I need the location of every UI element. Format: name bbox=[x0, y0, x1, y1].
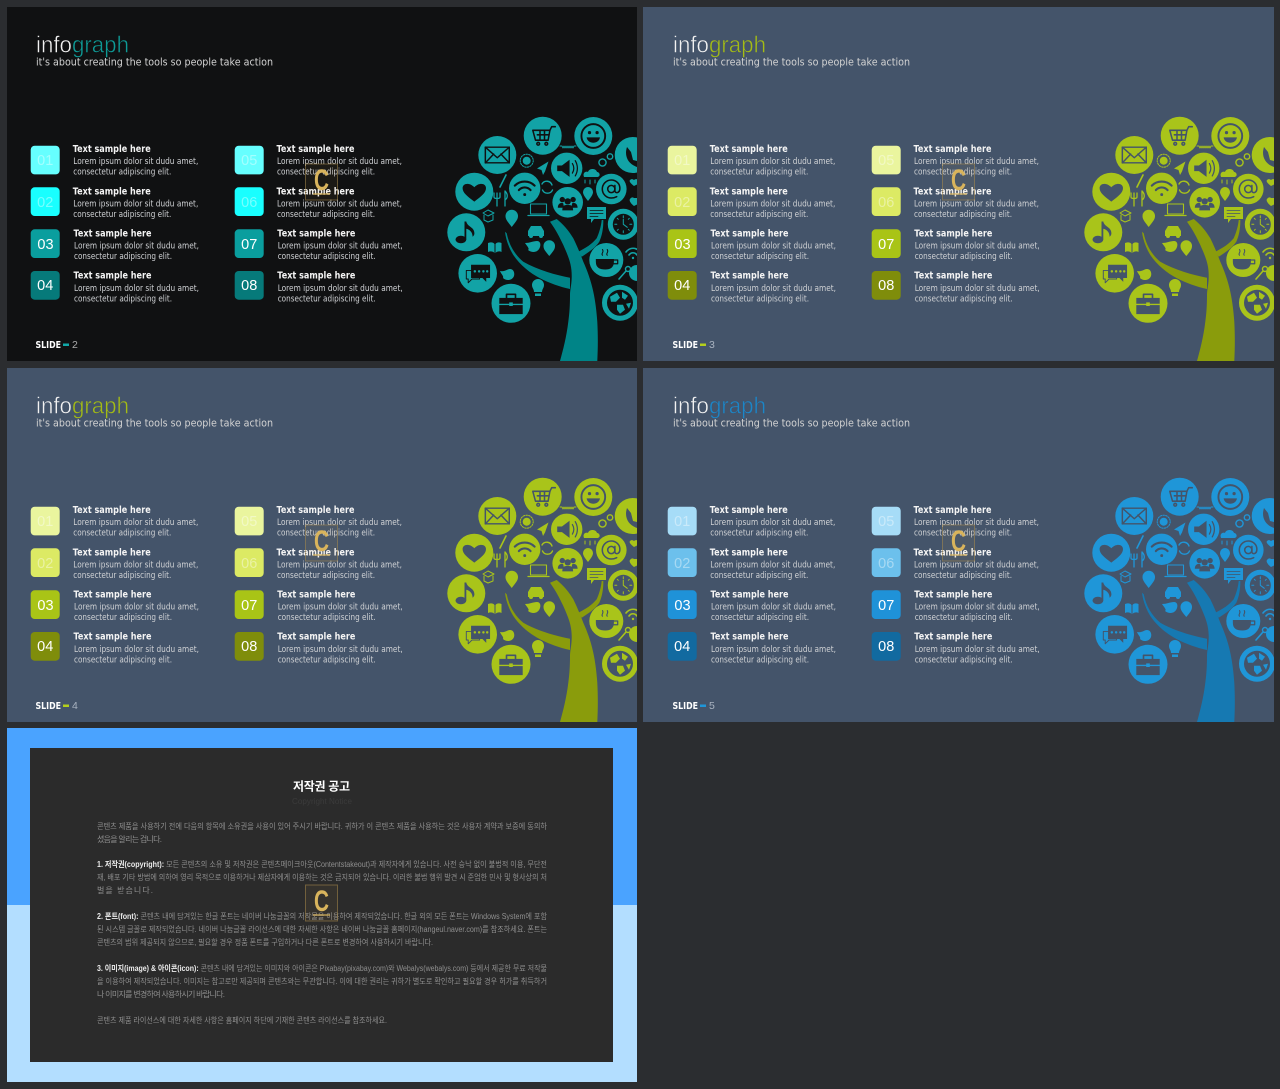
panel: slide 4 lime bbox=[7, 368, 651, 722]
list item 03: Lorem ipsum dolor sit dudu amet, bbox=[74, 241, 199, 251]
list item 06: consectetur adipiscing elit. bbox=[914, 571, 1012, 581]
section 2 font bbox=[97, 911, 548, 947]
intro paragraph bbox=[97, 821, 548, 844]
list item 07: consectetur adipiscing elit. bbox=[278, 252, 376, 262]
list item 03: 03 bbox=[37, 237, 54, 253]
list item 01 bbox=[668, 144, 835, 178]
list item 01: 01 bbox=[37, 153, 53, 169]
list item 05: 05 bbox=[241, 514, 257, 530]
list item 04: Lorem ipsum dolor sit dudu amet, bbox=[74, 284, 199, 294]
list item 08: consectetur adipiscing elit. bbox=[915, 294, 1013, 304]
watermark badge bbox=[306, 525, 338, 561]
slide number bbox=[36, 339, 78, 351]
list item 02: 02 bbox=[674, 556, 690, 572]
list item 05 bbox=[872, 505, 1039, 538]
tree graphic bbox=[447, 117, 651, 361]
list item 07: Text sample here bbox=[277, 228, 355, 239]
list item 04: consectetur adipiscing elit. bbox=[74, 655, 172, 665]
list item 05: Lorem ipsum dolor sit dudu amet, bbox=[277, 157, 402, 167]
list item 02: consectetur adipiscing elit. bbox=[73, 571, 171, 581]
watermark badge: C bbox=[951, 164, 966, 197]
list item 05: Lorem ipsum dolor sit dudu amet, bbox=[914, 157, 1039, 167]
list item 08: 08 bbox=[241, 278, 257, 294]
list item 01: 01 bbox=[37, 514, 53, 530]
list item 03 bbox=[668, 228, 836, 262]
list item 01: Lorem ipsum dolor sit dudu amet, bbox=[73, 518, 198, 528]
list item 05: consectetur adipiscing elit. bbox=[277, 168, 375, 178]
title: infograph bbox=[673, 392, 766, 418]
list item 02: consectetur adipiscing elit. bbox=[710, 210, 808, 220]
list item 02: Text sample here bbox=[710, 186, 788, 197]
tree graphic bbox=[1084, 478, 1280, 722]
list item 08: Lorem ipsum dolor sit dudu amet, bbox=[915, 645, 1040, 655]
list item 01: Text sample here bbox=[710, 505, 788, 516]
list item 01: Lorem ipsum dolor sit dudu amet, bbox=[710, 518, 835, 528]
list item 08: Text sample here bbox=[277, 270, 355, 282]
closing note: 콘텐츠 제품 라이선스에 대한 자세한 사항은 홈페이지 하단에 기재한 콘텐츠 라이선스를 참조하세요. bbox=[97, 1015, 387, 1025]
list item 08: Text sample here bbox=[277, 632, 355, 642]
section 1 copyright: 벌을 받습니다. bbox=[97, 885, 153, 895]
slide number: 3 bbox=[709, 339, 715, 351]
slide number bbox=[672, 700, 715, 712]
section 3 image and icon: 나 이미지를 변경하여 사용하시기 바랍니다. bbox=[97, 989, 225, 999]
list item 08: Lorem ipsum dolor sit dudu amet, bbox=[915, 284, 1040, 294]
slide number: 4 bbox=[72, 700, 78, 712]
watermark badge bbox=[942, 525, 974, 561]
list item 06: Text sample here bbox=[276, 186, 355, 197]
list item 03: consectetur adipiscing elit. bbox=[711, 252, 809, 262]
list item 01: Text sample here bbox=[710, 144, 788, 155]
section 2 font: 콘텐츠의 범위 제공되지 않으므로, 필요할 경우 정품 폰트를 구입하거나 다른 폰트로 변경하여 사용하시기 바랍니다. bbox=[97, 937, 433, 947]
list item 02: consectetur adipiscing elit. bbox=[73, 210, 171, 220]
list item 05: 05 bbox=[241, 153, 257, 169]
list item 06: Text sample here bbox=[276, 547, 355, 558]
list item 02: Lorem ipsum dolor sit dudu amet, bbox=[73, 199, 198, 209]
slide number: SLIDE bbox=[672, 701, 698, 712]
section 1 copyright: 1. 저작권(copyright): 모든 콘텐츠의 소유 및 저작권은 콘텐츠메이크아웃(Contentstakeout)과 제작자에게 있습니다. 사전 승낙 없이 불법적 이용, 무단전 bbox=[97, 859, 547, 869]
list item 01: consectetur adipiscing elit. bbox=[710, 168, 808, 178]
list item 05: consectetur adipiscing elit. bbox=[277, 528, 375, 538]
list item 06 bbox=[235, 186, 402, 220]
list item 03: Text sample here bbox=[74, 228, 152, 239]
list item 01: consectetur adipiscing elit. bbox=[73, 168, 171, 178]
list item 08 bbox=[872, 632, 1040, 665]
slide number: 2 bbox=[72, 339, 78, 351]
list item 02: Text sample here bbox=[73, 186, 151, 197]
section 3 image and icon: 을 이용하여 제작되었습니다. 이미지는 참고로만 제공되며 콘텐츠와는 무관합니다. 이에 대한 권리는 귀하가 별도로 확인하고 필요할 경우 허가를 취득하거 bbox=[97, 976, 547, 986]
list item 04: Lorem ipsum dolor sit dudu amet, bbox=[711, 645, 836, 655]
list item 07: Lorem ipsum dolor sit dudu amet, bbox=[915, 602, 1040, 612]
title: infograph bbox=[36, 32, 129, 58]
watermark badge: C bbox=[951, 525, 966, 558]
slide number: SLIDE bbox=[36, 340, 61, 351]
list item 06 bbox=[872, 547, 1039, 581]
list item 06: Lorem ipsum dolor sit dudu amet, bbox=[277, 560, 402, 570]
list item 06: Text sample here bbox=[914, 186, 992, 197]
slide number bbox=[36, 700, 78, 712]
list item 03: Text sample here bbox=[74, 589, 152, 600]
list item 01: Lorem ipsum dolor sit dudu amet, bbox=[710, 157, 835, 167]
list item 03: consectetur adipiscing elit. bbox=[74, 252, 172, 262]
subtitle: it's about creating the tools so people take action bbox=[36, 416, 273, 430]
list item 08: Text sample here bbox=[914, 270, 992, 282]
list item 08 bbox=[872, 270, 1040, 304]
intro paragraph: 셨음을 알리는 겁니다. bbox=[97, 834, 162, 844]
panel: slide 5 blue bbox=[643, 368, 1280, 722]
list item 04 bbox=[668, 270, 836, 304]
list item 07 bbox=[872, 589, 1040, 623]
intro paragraph: 콘텐츠 제품을 사용하기 전에 다음의 항목에 소유권을 사용이 있어 주시기 바랍니다. 귀하가 이 콘텐츠 제품을 사용하는 것은 사용자 계약과 보증에 동의하 bbox=[97, 821, 548, 831]
list item 06: Lorem ipsum dolor sit dudu amet, bbox=[914, 560, 1039, 570]
list item 02: Text sample here bbox=[73, 547, 151, 558]
list item 04: Text sample here bbox=[74, 270, 152, 282]
list item 06: 06 bbox=[878, 556, 894, 572]
section 1 copyright: 재, 배포 기타 방법에 의하여 영리 목적으로 이용하거나 제삼자에게 이용하는 것은 금지되어 있습니다. 이러한 불법 행위 발견 시 준엄한 민사 및 형사상의 처 bbox=[97, 872, 547, 882]
list item 01: Lorem ipsum dolor sit dudu amet, bbox=[73, 157, 198, 167]
list item 03: Text sample here bbox=[710, 228, 789, 239]
list item 01: 01 bbox=[674, 153, 690, 169]
list item 08: consectetur adipiscing elit. bbox=[278, 655, 376, 665]
list item 07: Text sample here bbox=[914, 589, 992, 600]
list item 05: Text sample here bbox=[914, 144, 992, 155]
list item 06: 06 bbox=[878, 195, 894, 211]
list item 01: Text sample here bbox=[73, 144, 151, 155]
list item 02: 02 bbox=[37, 195, 53, 211]
list item 03: consectetur adipiscing elit. bbox=[74, 613, 172, 623]
list item 07: Text sample here bbox=[914, 228, 992, 239]
slide number: 5 bbox=[709, 700, 715, 712]
section 3 image and icon bbox=[97, 963, 547, 999]
list item 08: consectetur adipiscing elit. bbox=[915, 655, 1013, 665]
list item 02: Lorem ipsum dolor sit dudu amet, bbox=[710, 199, 835, 209]
section 2 font: 된 시스템 글꼴로 제작되었습니다. 네이버 나눔글꼴 라이선스에 대한 자세한 사항은 네이버 나눔글꼴 홈페이지(hangeul.naver.com)를 참조하세요. 폰트는 bbox=[97, 924, 547, 934]
list item 04: Lorem ipsum dolor sit dudu amet, bbox=[711, 284, 836, 294]
list item 06: 06 bbox=[241, 556, 257, 572]
list item 07: consectetur adipiscing elit. bbox=[915, 252, 1013, 262]
list item 03: Lorem ipsum dolor sit dudu amet, bbox=[711, 241, 836, 251]
list item 04: consectetur adipiscing elit. bbox=[711, 655, 809, 665]
list item 03: 03 bbox=[674, 237, 691, 253]
list item 08: consectetur adipiscing elit. bbox=[278, 294, 376, 304]
list item 02: Text sample here bbox=[710, 547, 788, 558]
watermark badge: C bbox=[314, 525, 329, 558]
list item 02: Lorem ipsum dolor sit dudu amet, bbox=[710, 560, 835, 570]
list item 07: 07 bbox=[241, 237, 257, 253]
list item 08: 08 bbox=[878, 639, 894, 655]
panel: copyright notice bbox=[7, 728, 637, 1082]
watermark badge bbox=[942, 164, 974, 200]
list item 04: 04 bbox=[37, 639, 53, 655]
list item 04 bbox=[31, 632, 199, 665]
list item 03: Text sample here bbox=[710, 589, 789, 600]
title: infograph bbox=[673, 32, 766, 58]
list item 01: consectetur adipiscing elit. bbox=[73, 528, 171, 538]
notice heading: 저작권 공고 bbox=[293, 778, 350, 794]
list item 07: Lorem ipsum dolor sit dudu amet, bbox=[915, 241, 1040, 251]
list item 08 bbox=[235, 632, 403, 665]
list item 06: Lorem ipsum dolor sit dudu amet, bbox=[277, 199, 402, 209]
list item 03 bbox=[31, 589, 199, 623]
list item 04: Text sample here bbox=[710, 632, 789, 642]
list item 05: Lorem ipsum dolor sit dudu amet, bbox=[277, 518, 402, 528]
list item 04: Text sample here bbox=[710, 270, 789, 282]
watermark badge bbox=[306, 885, 338, 921]
panel: slide 3 lime bbox=[643, 7, 1280, 361]
subtitle: it's about creating the tools so people take action bbox=[36, 56, 273, 68]
list item 03: Lorem ipsum dolor sit dudu amet, bbox=[74, 602, 199, 612]
list item 03 bbox=[31, 228, 199, 262]
list item 06: Text sample here bbox=[914, 547, 992, 558]
list item 07 bbox=[235, 589, 403, 623]
list item 06 bbox=[235, 547, 402, 581]
list item 05: consectetur adipiscing elit. bbox=[914, 528, 1012, 538]
list item 07: consectetur adipiscing elit. bbox=[915, 613, 1013, 623]
subtitle: it's about creating the tools so people take action bbox=[673, 56, 910, 68]
list item 03: Lorem ipsum dolor sit dudu amet, bbox=[711, 602, 836, 612]
panel: slide 2 teal bbox=[7, 7, 651, 361]
list item 07: 07 bbox=[878, 237, 894, 253]
list item 02: 02 bbox=[37, 556, 53, 572]
list item 04: 04 bbox=[37, 278, 53, 294]
list item 08: 08 bbox=[241, 639, 257, 655]
list item 05: Text sample here bbox=[276, 144, 355, 155]
notice subheading: Copyright Notice bbox=[292, 797, 353, 806]
list item 05: 05 bbox=[878, 514, 894, 530]
list item 07: Lorem ipsum dolor sit dudu amet, bbox=[278, 602, 403, 612]
list item 02 bbox=[31, 186, 198, 220]
list item 08: Lorem ipsum dolor sit dudu amet, bbox=[278, 284, 403, 294]
list item 01: Text sample here bbox=[73, 505, 151, 516]
list item 02: consectetur adipiscing elit. bbox=[710, 571, 808, 581]
list item 02: 02 bbox=[674, 195, 690, 211]
list item 04: consectetur adipiscing elit. bbox=[74, 294, 172, 304]
list item 05 bbox=[872, 144, 1039, 178]
list item 08: Text sample here bbox=[914, 632, 992, 642]
list item 06: 06 bbox=[241, 195, 257, 211]
list item 07: Text sample here bbox=[277, 589, 355, 600]
slide number: SLIDE bbox=[672, 340, 698, 351]
list item 06: consectetur adipiscing elit. bbox=[277, 210, 375, 220]
list item 03: 03 bbox=[674, 598, 691, 614]
subtitle: it's about creating the tools so people take action bbox=[673, 416, 910, 430]
list item 04 bbox=[31, 270, 199, 304]
list item 04: Text sample here bbox=[74, 632, 152, 642]
tree graphic bbox=[1084, 117, 1280, 361]
list item 01 bbox=[668, 505, 835, 538]
watermark badge: C bbox=[314, 885, 329, 918]
list item 06: consectetur adipiscing elit. bbox=[914, 210, 1012, 220]
list item 08: Lorem ipsum dolor sit dudu amet, bbox=[278, 645, 403, 655]
list item 05: Text sample here bbox=[914, 505, 992, 516]
list item 06: Lorem ipsum dolor sit dudu amet, bbox=[914, 199, 1039, 209]
list item 07: Lorem ipsum dolor sit dudu amet, bbox=[278, 241, 403, 251]
list item 01 bbox=[31, 505, 198, 538]
list item 07: 07 bbox=[241, 598, 257, 614]
list item 04: 04 bbox=[674, 278, 690, 294]
list item 01: 01 bbox=[674, 514, 690, 530]
list item 08: 08 bbox=[878, 278, 894, 294]
list item 05 bbox=[235, 144, 402, 178]
list item 07 bbox=[872, 228, 1040, 262]
watermark badge: C bbox=[314, 164, 329, 197]
section 2 font: 2. 폰트(font): 콘텐츠 내에 담겨있는 한글 폰트는 네이버 나눔글꼴의 저작물을 이용하여 제작되었습니다. 한글 외의 모든 폰트는 Windows System에 포함 bbox=[97, 911, 548, 921]
list item 03 bbox=[668, 589, 836, 623]
list item 02: Lorem ipsum dolor sit dudu amet, bbox=[73, 560, 198, 570]
list item 05: Lorem ipsum dolor sit dudu amet, bbox=[914, 518, 1039, 528]
tree graphic bbox=[447, 478, 651, 722]
list item 05: 05 bbox=[878, 153, 894, 169]
list item 02 bbox=[31, 547, 198, 581]
list item 05: Text sample here bbox=[276, 505, 355, 516]
list item 02 bbox=[668, 186, 835, 220]
list item 07 bbox=[235, 228, 403, 262]
list item 06: consectetur adipiscing elit. bbox=[277, 571, 375, 581]
watermark badge bbox=[306, 164, 338, 200]
list item 05 bbox=[235, 505, 402, 538]
list item 01 bbox=[31, 144, 198, 178]
list item 04: consectetur adipiscing elit. bbox=[711, 294, 809, 304]
list item 07: 07 bbox=[878, 598, 894, 614]
list item 04: 04 bbox=[674, 639, 690, 655]
slide number: SLIDE bbox=[36, 701, 61, 712]
list item 05: consectetur adipiscing elit. bbox=[914, 168, 1012, 178]
list item 03: consectetur adipiscing elit. bbox=[711, 613, 809, 623]
section 3 image and icon: 3. 이미지(image) & 아이콘(icon): 콘텐츠 내에 담겨있는 이미지와 아이콘은 Pixabay(pixabay.com)와 Webalys(webalys.com) 등에서 제공한 무료 저작물 bbox=[97, 963, 547, 973]
list item 06 bbox=[872, 186, 1039, 220]
list item 03: 03 bbox=[37, 598, 54, 614]
list item 08 bbox=[235, 270, 403, 304]
list item 01: consectetur adipiscing elit. bbox=[710, 528, 808, 538]
slide number bbox=[672, 339, 715, 351]
list item 07: consectetur adipiscing elit. bbox=[278, 613, 376, 623]
section 1 copyright bbox=[97, 859, 547, 895]
list item 04: Lorem ipsum dolor sit dudu amet, bbox=[74, 645, 199, 655]
title: infograph bbox=[36, 392, 129, 418]
list item 02 bbox=[668, 547, 835, 581]
list item 04 bbox=[668, 632, 836, 665]
